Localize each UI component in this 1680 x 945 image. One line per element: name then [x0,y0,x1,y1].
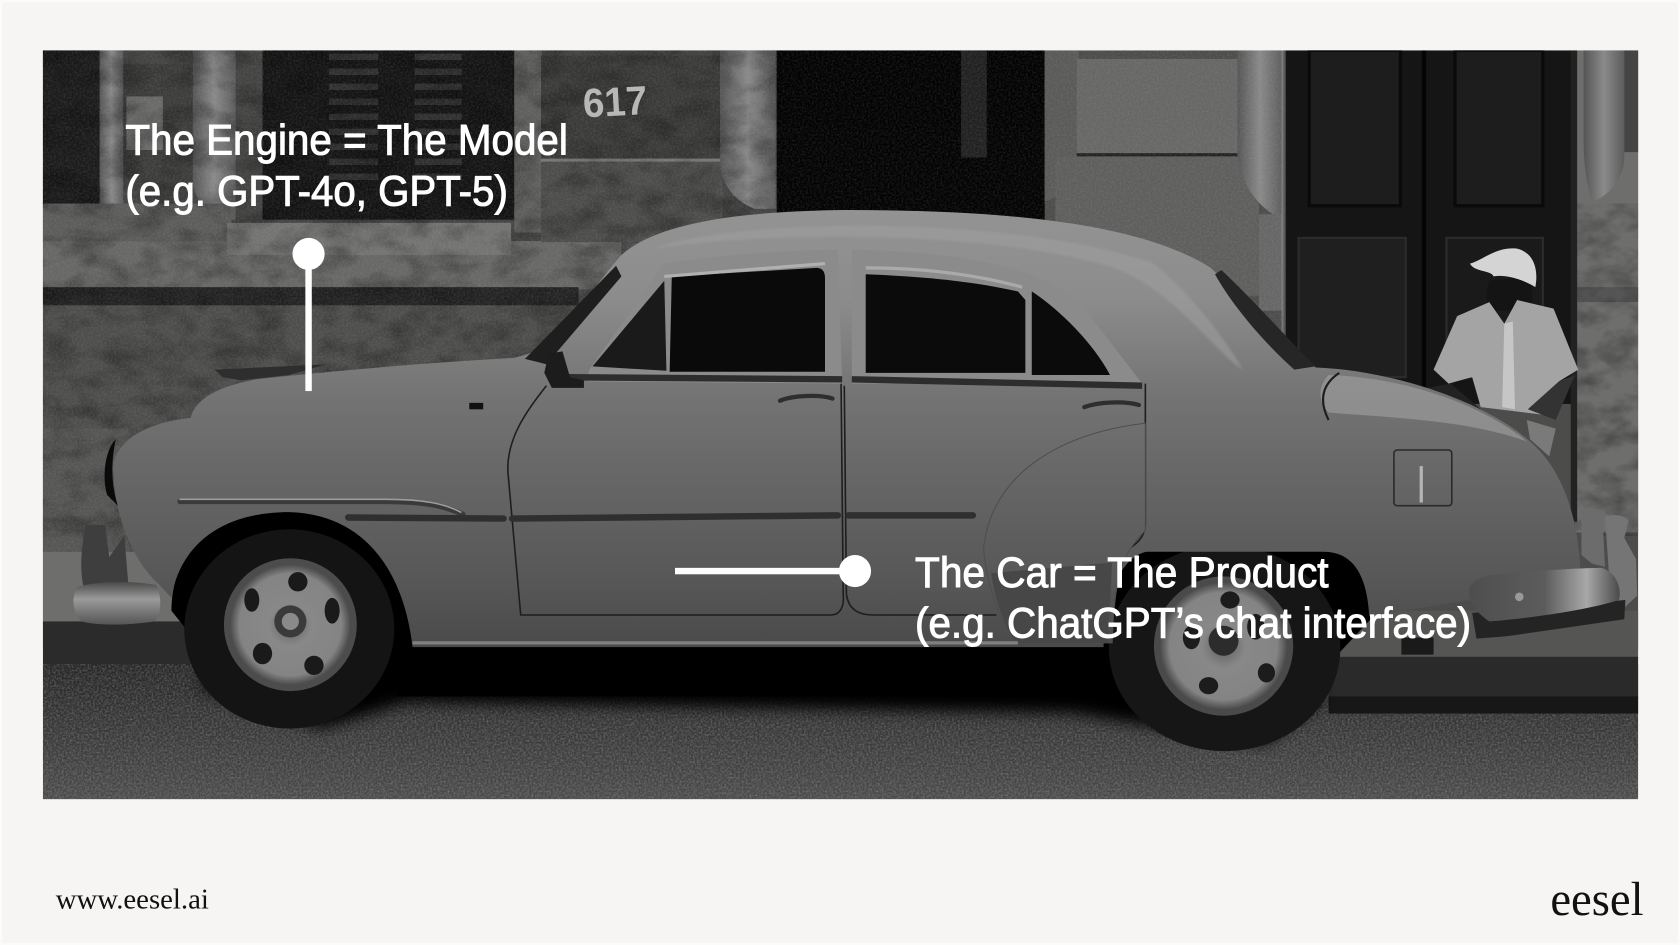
front bumper and grille [73,525,160,625]
callout: the car [675,549,1471,646]
headlight edge [105,439,118,506]
rear bumper and tail guards [1401,509,1637,655]
belt line trim [552,377,1142,386]
door handles [780,396,1139,407]
sidewalk, curb and road [43,552,1638,799]
heading: the car equals the product: The Car = The Product [915,549,1329,596]
windshield [525,266,621,364]
building facade [43,50,1638,650]
dark wooden door [1281,50,1577,522]
front side windows [592,264,825,372]
wheel arches [171,508,1374,664]
footer: logo: eesel [1550,874,1644,926]
rear stone guard [991,562,1112,624]
roof highlight [689,235,1241,368]
front wheel [184,529,394,729]
photo: vintage car parked in front of a weathered building [43,50,1638,799]
seated man with white cap [1427,248,1578,456]
callout: the engine [125,116,568,391]
shadow under the car [194,664,1328,752]
painted house number: 617 [582,77,648,126]
rear wheel [1109,545,1340,751]
rear window [1215,270,1316,370]
hood ornament [214,364,327,380]
pointer: engine [292,238,325,391]
door seams and body lines [508,373,1339,615]
rear fender bulge [984,423,1145,643]
rear side windows [866,268,1110,375]
trunk highlight [1320,375,1527,441]
example: ChatGPT interface: (e.g. ChatGPT’s chat interface) [915,599,1471,646]
hood badge [469,403,483,409]
example: GPT models: (e.g. GPT-4o, GPT-5) [125,168,508,215]
heading: the engine equals the model: The Engine = The Model [125,116,568,163]
window frames [587,334,1141,384]
rocker panel trim [412,641,1018,644]
pointer: car [675,555,871,587]
footer: website: www.eesel.ai [56,884,209,916]
fuel door and ornament [1394,450,1452,506]
car body [113,210,1580,647]
side mirror [544,351,584,388]
side chrome trim [180,499,973,519]
wall patina [43,50,1638,554]
